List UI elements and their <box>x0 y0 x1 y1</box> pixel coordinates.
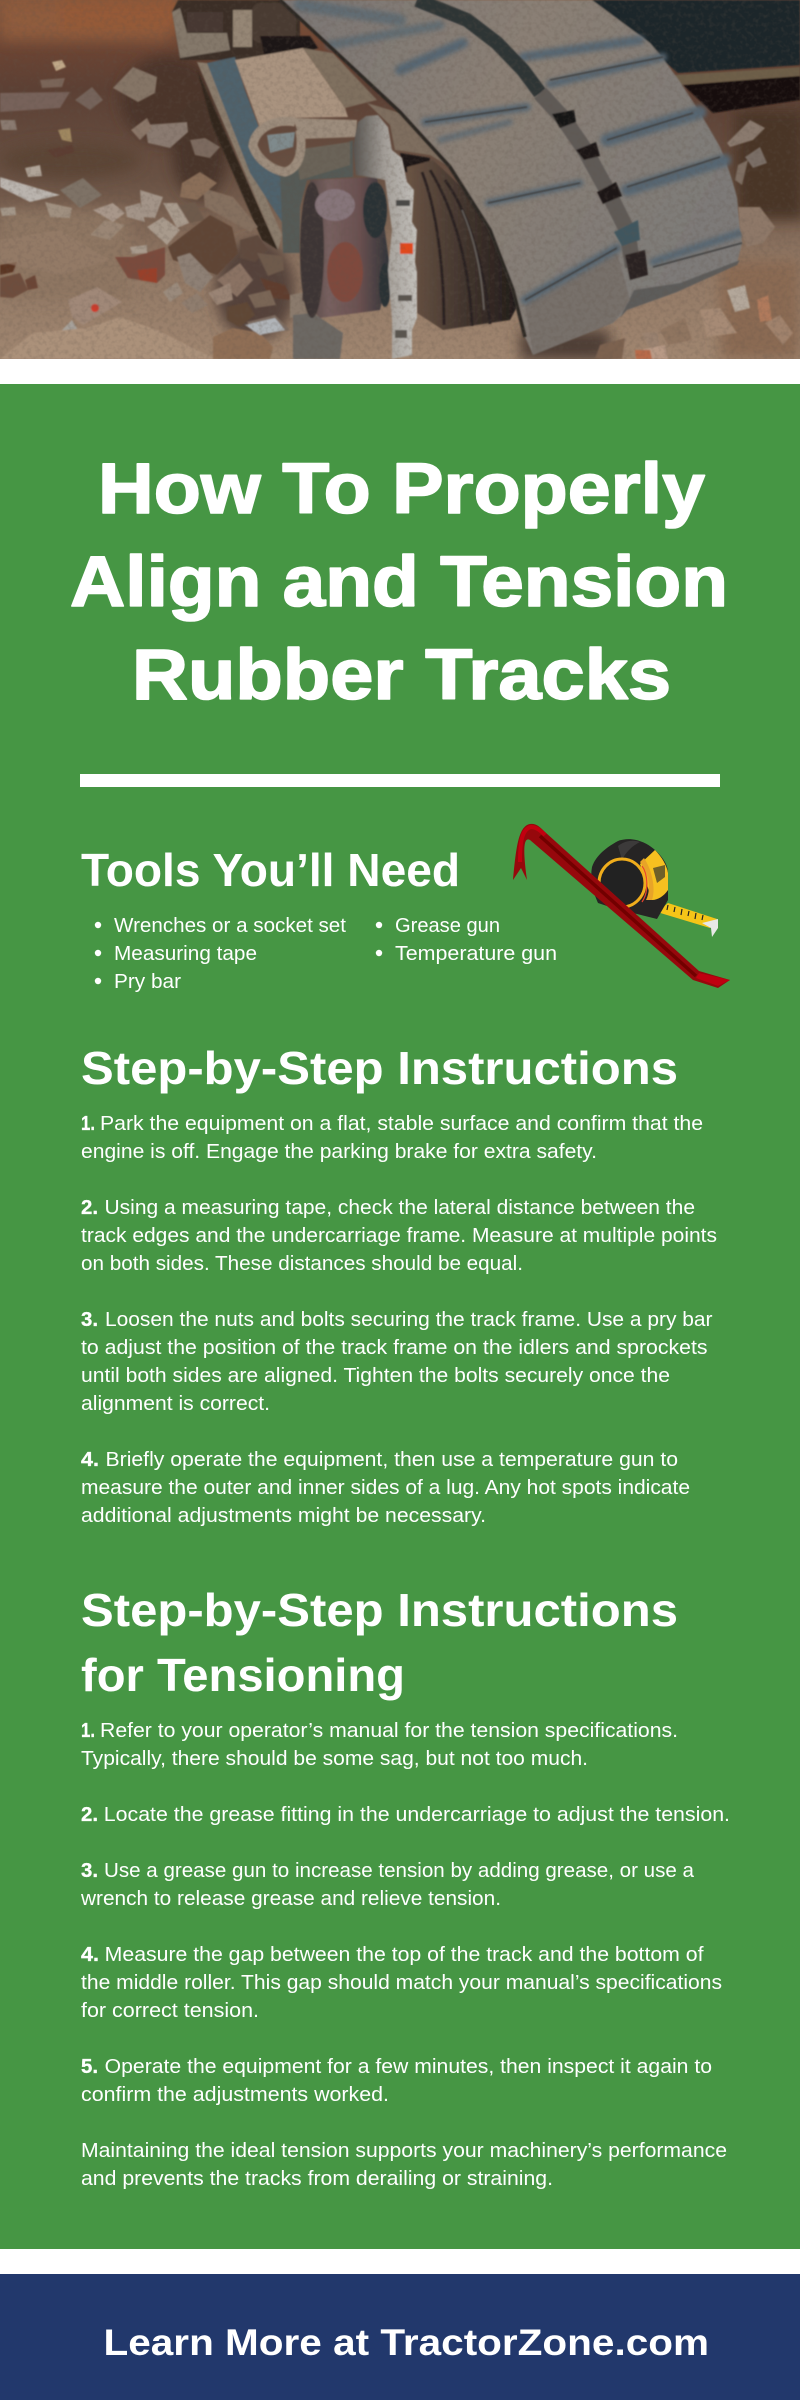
tension step 4: Measure the gap between the top of the track and the bottom of <box>105 1944 704 1966</box>
step 3: until both sides are aligned. Tighten the bolts securely once the <box>81 1365 670 1387</box>
sprocket <box>353 115 417 359</box>
rubble: right side <box>727 120 765 147</box>
heading: step-by-step instructions for tensioning <box>81 1584 678 1701</box>
step 1: 1. <box>81 1113 95 1135</box>
tools list: column one: Wrenches or a socket set <box>114 915 346 937</box>
tension step 1 <box>81 1720 678 1770</box>
closing note: Maintaining the ideal tension supports your machinery’s performance <box>81 2140 727 2162</box>
title <box>70 450 728 715</box>
closing note <box>81 2140 727 2190</box>
track inner edge <box>280 0 525 337</box>
icon: tape measure and pry bar <box>513 824 730 988</box>
title: How To Properly <box>98 450 706 529</box>
step 1: engine is off. Engage the parking brake for extra safety. <box>81 1141 597 1163</box>
tools list: column one: Measuring tape <box>114 943 257 965</box>
title: Rubber Tracks <box>132 636 671 715</box>
step 2: track edges and the undercarriage frame. Measure at multiple points <box>81 1225 717 1247</box>
frame outer strip <box>197 62 282 250</box>
step 3: to adjust the position of the track frame on the idlers and sprockets <box>81 1337 708 1359</box>
rubble: sand pile <box>0 317 215 359</box>
icon: tape measure <box>591 839 718 937</box>
heading: tools you'll need: Tools You’ll Need <box>81 844 460 896</box>
tension step 3 <box>80 1860 695 1910</box>
tension step 5 <box>81 2056 712 2106</box>
photo grain <box>0 0 800 359</box>
heading: step-by-step instructions for tensioning: for Tensioning <box>81 1649 405 1701</box>
step 3 <box>81 1309 713 1415</box>
tension step 4: the middle roller. This gap should match your manual’s specifications <box>81 1972 722 1994</box>
step 4: additional adjustments might be necessary. <box>81 1505 486 1527</box>
step 4 <box>81 1449 690 1527</box>
tension step 1: Refer to your operator’s manual for the tension specifications. <box>100 1720 678 1742</box>
tension step 2: 2. <box>81 1804 98 1826</box>
tension step 4 <box>81 1944 722 2022</box>
dark machine panel <box>590 0 800 73</box>
tension step 5: confirm the adjustments worked. <box>81 2084 389 2106</box>
step 3: Loosen the nuts and bolts securing the track frame. Use a pry bar <box>105 1309 713 1331</box>
heading: step-by-step instructions: Step-by-Step Instructions <box>81 1042 678 1094</box>
frame blue side <box>207 57 282 222</box>
step 4: measure the outer and inner sides of a lug. Any hot spots indicate <box>81 1477 690 1499</box>
step 4: 4. <box>81 1449 99 1471</box>
tension step 5: Operate the equipment for a few minutes, then inspect it again to <box>105 2056 712 2078</box>
section: tools <box>81 824 730 993</box>
tools list: column two <box>376 915 557 965</box>
step 3: 3. <box>81 1309 98 1331</box>
step 2 <box>81 1197 717 1275</box>
tension step 4: for correct tension. <box>81 2000 259 2022</box>
track body <box>280 0 742 355</box>
step 3: alignment is correct. <box>81 1393 270 1415</box>
closing note: and prevents the tracks from derailing or straining. <box>81 2168 553 2190</box>
tension step 5: 5. <box>81 2056 98 2078</box>
lug gaps <box>425 57 742 300</box>
tension step 3: 3. <box>81 1860 98 1882</box>
header photo: rubber track and sprocket on rubble <box>0 0 800 360</box>
undercarriage top pieces <box>172 0 300 60</box>
step 2: 2. <box>81 1197 98 1219</box>
footer banner <box>0 2274 800 2400</box>
track side wall <box>620 260 740 318</box>
title: Align and Tension <box>70 543 728 622</box>
tension step 3: wrench to release grease and relieve tension. <box>80 1888 501 1910</box>
wheel disc behind sprocket <box>400 153 430 175</box>
tools list: column one: Pry bar <box>114 971 181 993</box>
step 2: on both sides. These distances should be equal. <box>81 1253 523 1275</box>
tension step 1: Typically, there should be some sag, but not too much. <box>81 1748 588 1770</box>
step 2: Using a measuring tape, check the lateral distance between the <box>104 1197 695 1219</box>
tools list: column one <box>95 915 346 993</box>
heading: step-by-step instructions for tensioning: Step-by-Step Instructions <box>81 1584 678 1636</box>
frame shadow on soil <box>197 70 278 250</box>
step 1 <box>81 1113 703 1163</box>
section: alignment steps <box>81 1042 717 1527</box>
step 4: Briefly operate the equipment, then use a temperature gun to <box>106 1449 678 1471</box>
footer call to action: Learn More at TractorZone.com <box>104 2322 709 2363</box>
track blue-grey streaks <box>300 5 742 300</box>
rubble: far-left and middle <box>113 67 157 102</box>
tension step 1: 1. <box>81 1720 95 1742</box>
centre groove <box>417 0 540 93</box>
tools list: column two: Grease gun <box>395 915 500 937</box>
lifting eye <box>293 118 357 139</box>
icon: pry bar <box>513 824 730 988</box>
panel: green content background <box>0 384 800 2249</box>
title divider <box>80 774 720 787</box>
tension step 2: Locate the grease fitting in the undercarriage to adjust the tension. <box>104 1804 730 1826</box>
section: tensioning steps <box>80 1584 730 2190</box>
step 1: Park the equipment on a flat, stable surface and confirm that the <box>100 1113 703 1135</box>
sand on frame top <box>235 48 348 128</box>
tension step 4: 4. <box>81 1944 99 1966</box>
frame lower body <box>280 140 353 253</box>
hub <box>302 177 390 318</box>
tools list: column two: Temperature gun <box>395 943 557 965</box>
tension step 3: Use a grease gun to increase tension by adding grease, or use a <box>104 1860 695 1882</box>
